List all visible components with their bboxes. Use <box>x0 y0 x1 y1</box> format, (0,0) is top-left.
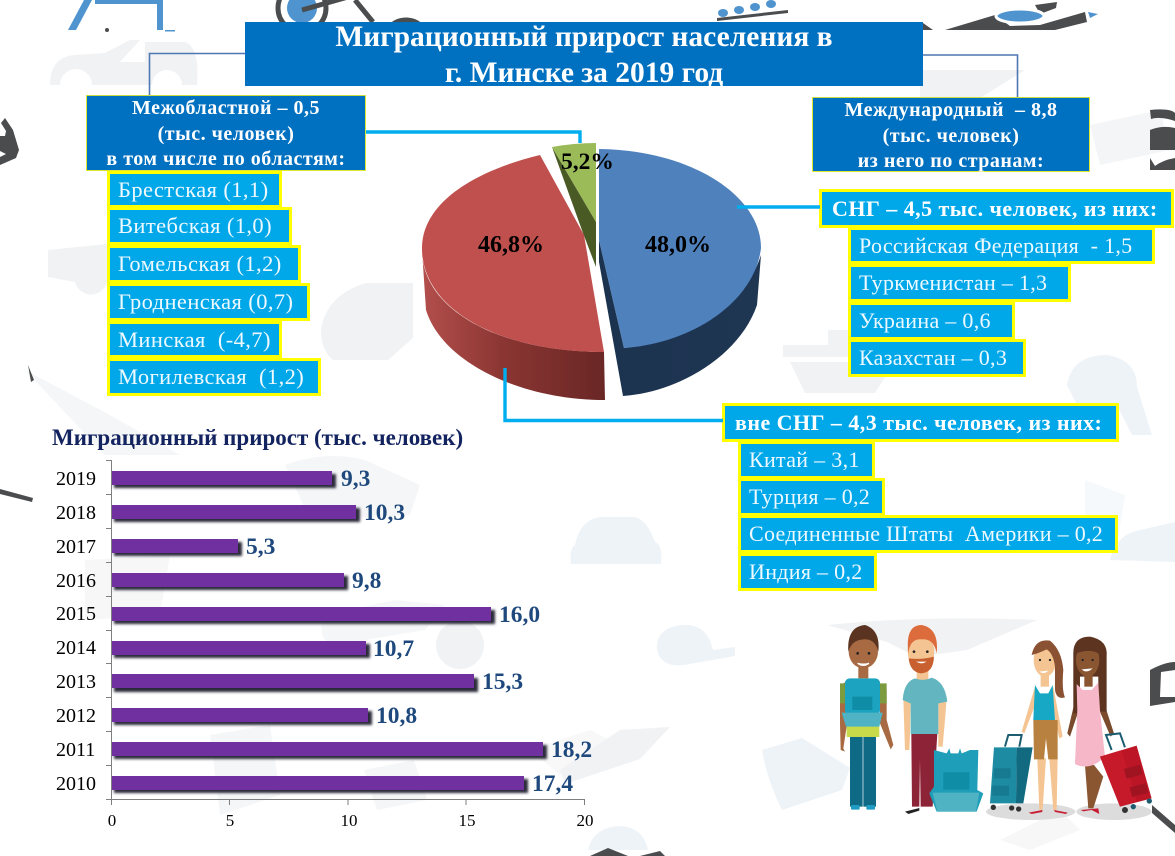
pie labels <box>478 149 711 258</box>
year labels: 2012 <box>56 705 96 727</box>
item: Minsk: Минская (-4,7) <box>118 326 271 352</box>
panel: outside CIS <box>722 403 1119 591</box>
value axis labels: 20 <box>576 811 594 830</box>
item: Ukraine <box>848 302 1015 340</box>
axes <box>106 460 584 805</box>
item: Turkey: Турция – 0,2 <box>749 484 870 509</box>
bar shadows <box>114 474 547 793</box>
heading: international <box>812 97 1090 172</box>
year labels <box>56 468 96 795</box>
woman in shorts <box>1022 640 1068 814</box>
item: Ukraine: Украина – 0,6 <box>859 308 991 333</box>
shadows <box>986 803 1075 820</box>
pie slice: 46.8% red <box>422 155 605 400</box>
item: China: Китай – 3,1 <box>749 447 860 472</box>
value axis labels: 0 <box>108 811 116 830</box>
heading: interregional: в том числе по областям: <box>106 148 346 170</box>
title: Миграционный прирост населения в <box>335 21 833 53</box>
item: Russia <box>848 227 1155 264</box>
item: Vitebsk <box>107 207 292 245</box>
item: Grodno <box>107 283 310 321</box>
item: Vitebsk: Витебская (1,0) <box>118 213 272 238</box>
year labels: 2018 <box>56 502 96 524</box>
item: India: Индия – 0,2 <box>749 559 863 584</box>
item: outside CIS heading <box>722 403 1119 442</box>
item: India <box>738 553 877 591</box>
item: outside CIS heading: вне СНГ – 4,3 тыс. человек, из них: <box>735 410 1102 434</box>
heading: international: (тыс. человек) <box>883 125 1019 147</box>
heading: interregional: (тыс. человек) <box>158 123 294 145</box>
year labels: 2019 <box>56 468 96 490</box>
value axis labels <box>108 811 594 830</box>
year labels: 2010 <box>56 773 96 795</box>
heading: international: из него по странам: <box>858 150 1044 172</box>
item: Mogilev: Могилевская (1,2) <box>118 364 304 389</box>
year labels: 2014 <box>56 637 96 659</box>
item: Grodno: Гродненская (0,7) <box>118 289 293 314</box>
pie labels: 5,2% <box>561 149 614 175</box>
title: г. Минске за 2019 год <box>445 57 723 89</box>
pie labels: 48,0% <box>645 232 711 258</box>
year labels: 2011 <box>56 739 95 761</box>
year labels: 2013 <box>56 671 96 693</box>
heading: interregional: Межобластной – 0,5 <box>132 97 320 119</box>
year labels: 2017 <box>56 536 96 558</box>
teal suitcase <box>990 735 1033 812</box>
heading: international: Международный – 8,8 <box>845 99 1057 121</box>
value labels: 17,4 <box>532 771 573 797</box>
item: Turkey <box>738 478 885 516</box>
value labels: 10,8 <box>376 703 417 729</box>
item: Gomel: Гомельская (1,2) <box>118 251 282 276</box>
year labels: 2015 <box>56 603 96 625</box>
item: Mogilev <box>107 358 321 396</box>
item: Turkmenistan: Туркменистан – 1,3 <box>859 270 1047 295</box>
item: Kazakhstan <box>848 339 1026 377</box>
value labels: 5,3 <box>246 534 275 560</box>
item: CIS <box>819 189 1174 228</box>
panel: interregional migration <box>86 95 366 396</box>
value labels: 10,3 <box>364 500 405 526</box>
item: USA <box>738 515 1118 553</box>
item: USA: Соединенные Штаты Америки – 0,2 <box>749 521 1103 546</box>
value labels: 9,3 <box>341 466 370 492</box>
heading: interregional <box>86 95 366 171</box>
value labels: 16,0 <box>499 602 540 628</box>
value axis labels: 15 <box>458 811 476 830</box>
pie labels: 46,8% <box>478 232 544 258</box>
value axis labels: 5 <box>226 811 234 830</box>
item: China <box>738 441 875 479</box>
value labels: 15,3 <box>482 669 523 695</box>
value labels: 10,7 <box>373 636 414 662</box>
pie slice: 5.2% green <box>552 143 596 267</box>
item: Brest: Брестская (1,1) <box>118 176 268 202</box>
year labels: 2016 <box>56 570 96 592</box>
bars <box>112 471 543 790</box>
value labels <box>246 466 592 797</box>
item: Russia: Российская Федерация - 1,5 <box>859 232 1132 258</box>
value axis labels: 10 <box>340 811 358 830</box>
pie slice: 48.0% blue <box>599 149 761 396</box>
item: CIS: СНГ – 4,5 тыс. человек, из них: <box>832 196 1158 220</box>
item: Kazakhstan: Казахстан – 0,3 <box>859 345 1007 370</box>
man with beard <box>903 625 947 814</box>
title <box>245 22 923 86</box>
item: Brest <box>107 171 282 208</box>
panel: international migration <box>812 97 1174 377</box>
item: Minsk <box>107 321 282 358</box>
red suitcase <box>1100 733 1152 813</box>
item: Turkmenistan <box>848 264 1071 302</box>
item: Gomel <box>107 245 301 283</box>
value labels: 18,2 <box>551 737 592 763</box>
chart title: Миграционный прирост (тыс. человек) <box>52 425 463 450</box>
man with backpack <box>840 625 893 810</box>
backpack on floor <box>929 748 983 812</box>
value labels: 9,8 <box>352 568 381 594</box>
woman in pink dress <box>1067 637 1114 814</box>
